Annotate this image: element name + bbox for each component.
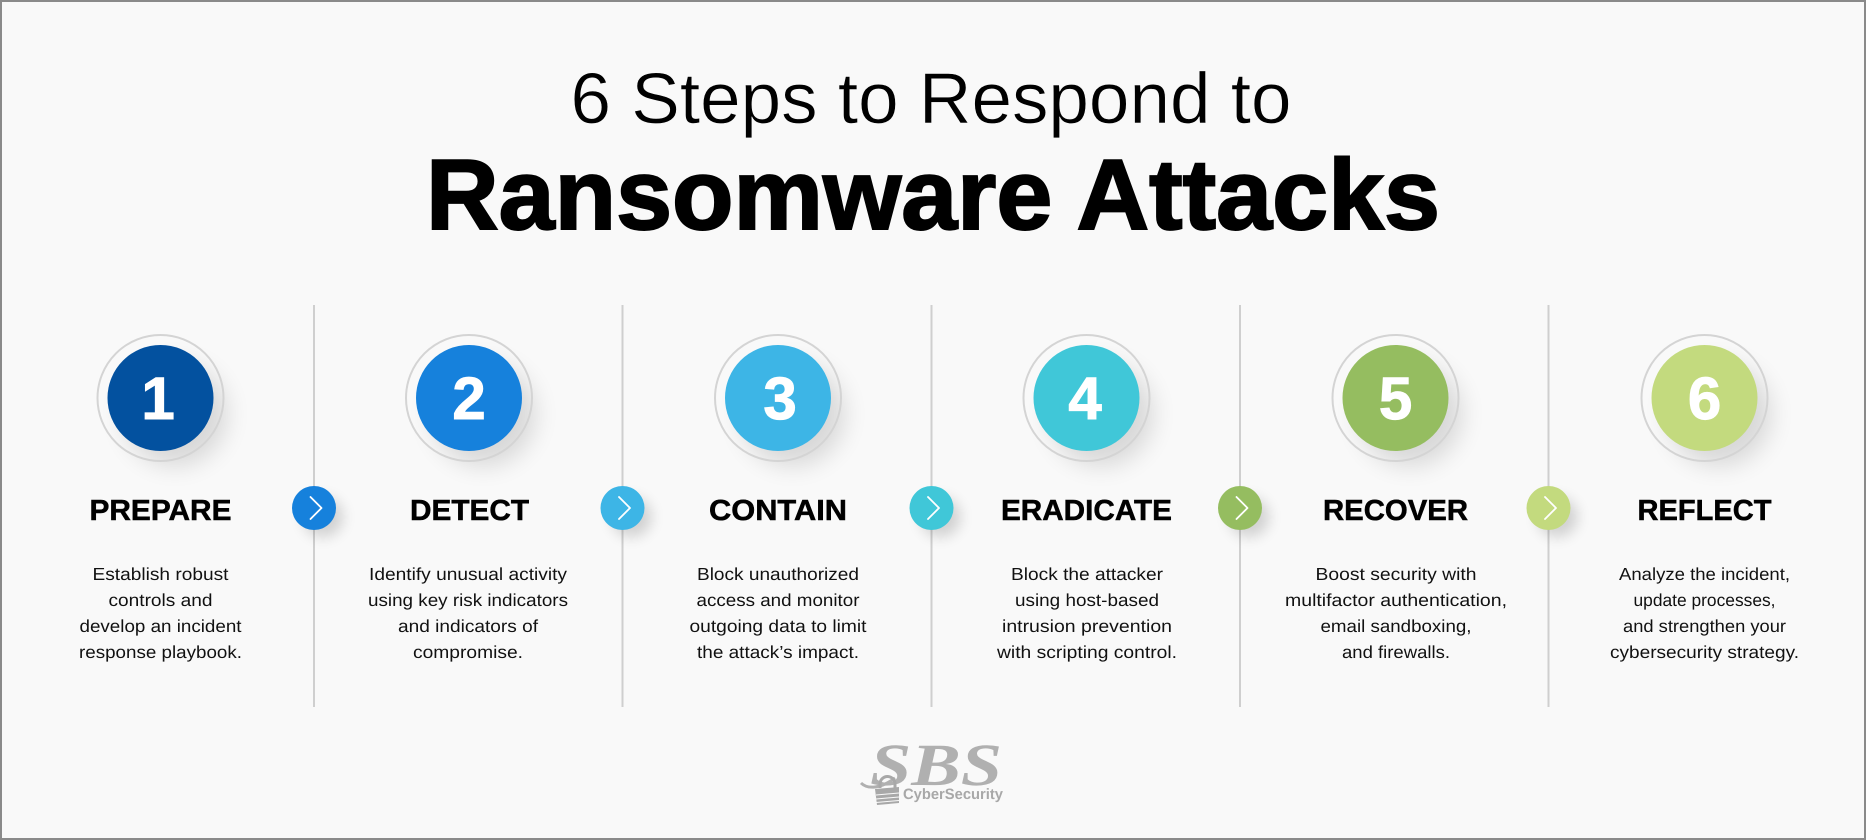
arrow 1 [292, 486, 343, 537]
title [426, 59, 1440, 251]
arrow 2 [600, 486, 652, 537]
description: prepare [79, 564, 242, 662]
description: contain: Block unauthorized [697, 564, 859, 584]
description: prepare: develop an incident [80, 616, 242, 636]
description: eradicate: using host-based [1015, 590, 1159, 610]
heading: reflect: REFLECT [1638, 495, 1772, 527]
badge 3: 3 [763, 365, 797, 432]
arrow 3 [910, 486, 960, 537]
description: contain: outgoing data to limit [690, 616, 867, 636]
description: reflect: cybersecurity strategy. [1610, 642, 1799, 662]
heading: recover: RECOVER [1323, 495, 1468, 527]
step 1: prepare [79, 335, 242, 662]
description: prepare: controls and [108, 590, 212, 610]
description: recover: email sandboxing, [1320, 616, 1472, 636]
arrow 5 [1526, 486, 1578, 537]
description: reflect: update processes, [1634, 590, 1776, 610]
logo swash [861, 778, 895, 787]
description: eradicate: Block the attacker [1011, 564, 1163, 584]
description: prepare: response playbook. [79, 642, 242, 662]
description: contain: the attack’s impact. [697, 642, 859, 662]
logo wordmark: SBS [870, 732, 1002, 798]
description: contain: access and monitor [696, 590, 860, 610]
step 4: eradicate [996, 335, 1177, 662]
badge 5: 5 [1379, 365, 1412, 432]
heading: eradicate: ERADICATE [1001, 495, 1172, 527]
step 2: detect [368, 335, 568, 662]
step 3: contain [690, 335, 867, 662]
description: detect: compromise. [413, 642, 523, 662]
heading: contain: CONTAIN [709, 495, 847, 527]
description: contain [690, 564, 867, 662]
description: recover: multifactor authentication, [1285, 590, 1507, 610]
description: detect [368, 564, 568, 662]
description: detect: using key risk indicators [368, 590, 568, 610]
logo: SBS CyberSecurity [861, 732, 1004, 805]
description: prepare: Establish robust [92, 564, 229, 584]
badge 3 [715, 335, 844, 466]
heading: prepare: PREPARE [90, 495, 232, 527]
badge 2 [406, 335, 536, 466]
badge 2: 2 [452, 365, 486, 432]
description: reflect: Analyze the incident, [1619, 564, 1790, 584]
badge 4: 4 [1068, 365, 1102, 432]
badge 6: 6 [1688, 365, 1721, 432]
icon: padlock [875, 777, 899, 805]
title line 1: 6 Steps to Respond to [570, 59, 1292, 139]
badge 6 [1642, 335, 1771, 466]
description: eradicate: with scripting control. [996, 642, 1177, 662]
description: reflect [1610, 564, 1799, 662]
badge 1: 1 [141, 365, 175, 432]
description: reflect: and strengthen your [1623, 616, 1786, 636]
description: recover: Boost security with [1316, 564, 1476, 584]
title line 2: Ransomware Attacks [426, 139, 1440, 251]
step 5: recover [1285, 335, 1507, 662]
description: eradicate [996, 564, 1177, 662]
description: eradicate: intrusion prevention [1002, 616, 1172, 636]
badge 1 [98, 335, 227, 466]
arrow 4 [1218, 486, 1269, 537]
description: recover [1285, 564, 1507, 662]
description: detect: and indicators of [398, 616, 538, 636]
description: detect: Identify unusual activity [369, 564, 567, 584]
description: recover: and firewalls. [1342, 642, 1450, 662]
step 6: reflect [1610, 335, 1799, 662]
badge 4 [1024, 335, 1153, 466]
logo tagline: CyberSecurity [903, 786, 1004, 803]
badge 5 [1332, 335, 1462, 466]
heading: detect: DETECT [410, 495, 529, 527]
